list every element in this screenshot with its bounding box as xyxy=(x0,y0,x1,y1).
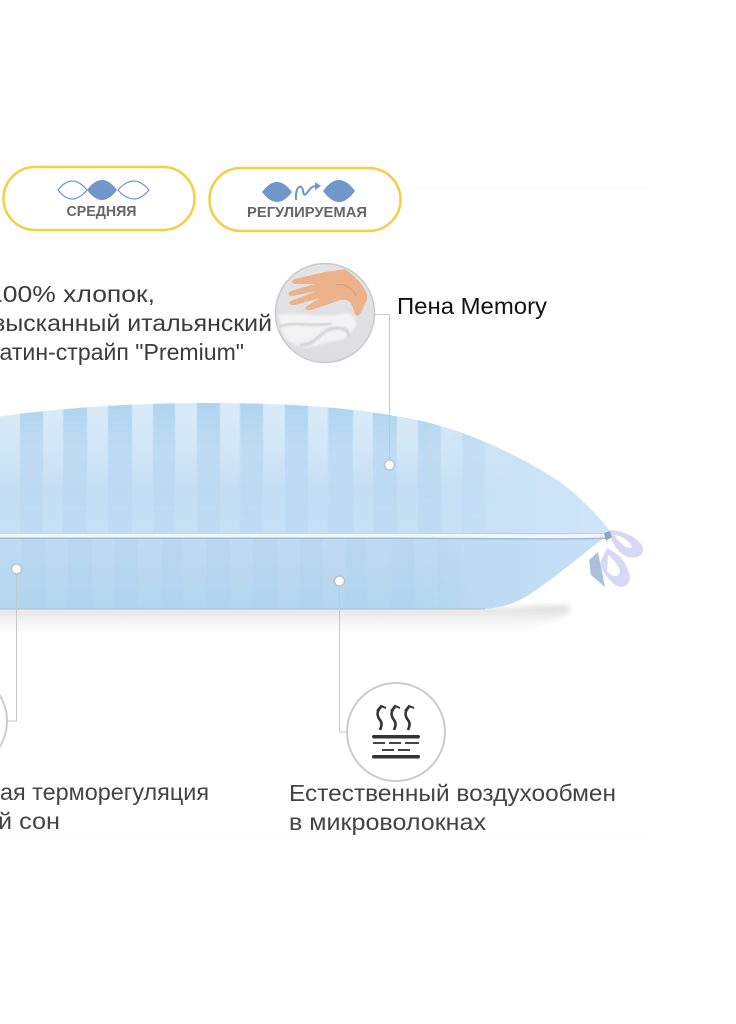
pillow bottom edge xyxy=(0,608,485,610)
icon: adjustable firmness leaves and arrow xyxy=(262,180,355,202)
pillow corner clasp xyxy=(604,531,612,541)
icon: hand pressing memory foam xyxy=(276,264,374,362)
text: thermoregulation: ая терморегуляция xyxy=(0,779,209,805)
callout connector: thermoregulation xyxy=(7,569,16,721)
text: air exchange: Естественный воздухообмен xyxy=(289,780,616,806)
pillow white piping xyxy=(0,533,606,540)
callout dot: memory foam xyxy=(384,460,394,470)
badge label: medium: СРЕДНЯЯ xyxy=(66,204,136,220)
pillow upper panel with satin stripes xyxy=(0,400,625,540)
pillow lower panel with satin stripes xyxy=(0,539,602,609)
icon: thermoregulation circle xyxy=(0,672,7,770)
shadow under pillow xyxy=(0,605,571,632)
infographic canvas xyxy=(0,166,643,835)
label: memory foam: Пена Memory xyxy=(397,293,548,319)
text: air exchange xyxy=(289,780,616,835)
pillow xyxy=(0,400,625,611)
callout dot: air exchange xyxy=(334,576,344,586)
text: thermoregulation xyxy=(0,779,209,834)
callout connector: memory foam xyxy=(374,314,390,465)
badge: medium firmness xyxy=(4,167,194,230)
badge: adjustable firmness xyxy=(210,168,400,231)
callout connector: air exchange xyxy=(340,581,347,732)
text: air exchange: в микроволокнах xyxy=(289,809,487,835)
ribbon loops xyxy=(589,530,643,587)
text: cover material xyxy=(0,281,272,365)
badge label: adjustable: РЕГУЛИРУЕМАЯ xyxy=(247,205,367,221)
callout dot: thermoregulation xyxy=(12,564,22,574)
icon: rising heat and air exchange xyxy=(347,683,445,781)
icon: medium firmness leaves xyxy=(58,180,149,200)
